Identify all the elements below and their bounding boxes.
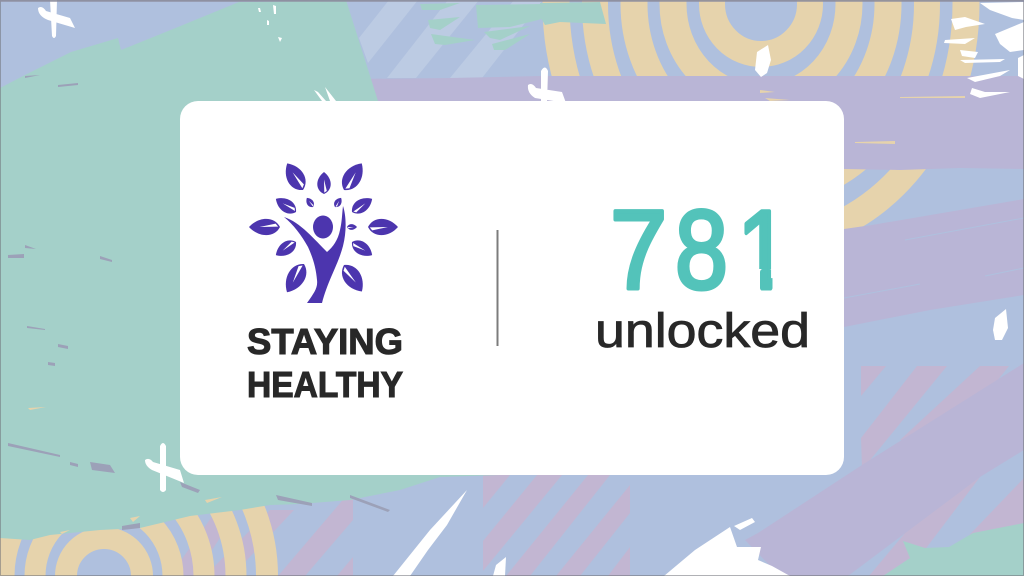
number: 781: 7 [610, 188, 667, 312]
person head [313, 216, 333, 238]
white splash bottom [664, 527, 790, 576]
green main brush stroke [0, 0, 500, 540]
white cross top middle [528, 68, 566, 104]
heading: Staying Healthy: STAYING [247, 321, 403, 362]
lavender lower right brush stroke [745, 363, 1024, 576]
heading: Staying Healthy: HEALTHY [247, 364, 403, 405]
middle bottom pink stripes [483, 475, 630, 576]
white blob right [993, 309, 1008, 340]
bottom concentric rings [0, 405, 267, 576]
white blob top [755, 45, 771, 77]
lavender right brush stroke [844, 199, 1024, 327]
person body [284, 206, 346, 303]
leaves [249, 159, 398, 297]
white brush lower middle [393, 490, 467, 576]
white cross top left [38, 0, 75, 38]
number: 781: 1 [737, 188, 790, 313]
green top brush strokes [420, 2, 606, 50]
white specks in green [314, 90, 326, 101]
icon: tree person logo [249, 159, 398, 303]
top light diagonal stripes [359, 0, 543, 78]
white cross lower left [145, 443, 184, 492]
tan and grey paint specks [8, 75, 390, 530]
lavender horizontal brush band [350, 76, 1024, 170]
bottom left pink stripes [170, 493, 353, 576]
number: 781: 8 [675, 188, 728, 313]
number: 781 [613, 208, 772, 292]
top concentric rings [556, 0, 966, 242]
lower right pink stripes [861, 366, 1024, 576]
label: unlocked: unlocked [595, 305, 810, 358]
white brush top right [951, 17, 985, 30]
green bottom right brush stroke [883, 523, 1024, 576]
divider [496, 230, 498, 346]
panel: white card [180, 101, 844, 475]
